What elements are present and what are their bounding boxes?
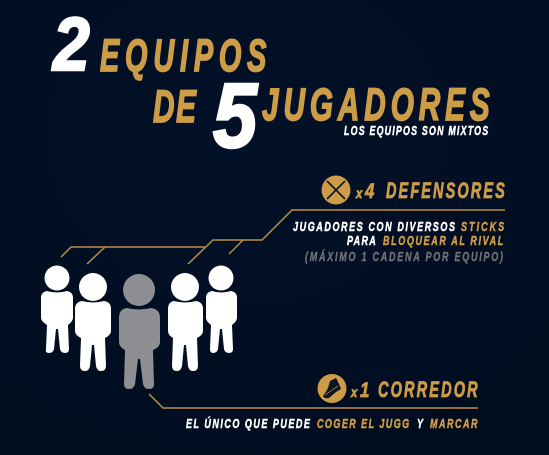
heading: runner: 1 (360, 379, 369, 403)
player: runner (grey) (119, 274, 160, 389)
heading: runner: CORREDOR (378, 377, 478, 402)
player: far left defender (41, 266, 73, 353)
subtitle: LOS EQUIPOS SON MIXTOS (344, 124, 489, 139)
text: defenders description (293, 221, 505, 264)
text: runner description: MARCAR (430, 418, 478, 431)
player: right defender (168, 273, 203, 371)
text: runner description (186, 417, 478, 431)
title: 2 (51, 2, 90, 86)
connector lines: defenders (61, 210, 505, 264)
text: defenders description: (MÁXIMO 1 CADENA POR EQUIPO) (305, 250, 503, 264)
connector line: runner (149, 394, 478, 408)
title: DE (153, 82, 197, 133)
text: runner description: Y (417, 418, 424, 431)
heading: defenders: x (355, 186, 363, 201)
icon: crossed sticks (322, 176, 350, 204)
text: defenders description: JUGADORES CON DIVERSOS (293, 221, 456, 234)
title: JUGADORES (262, 80, 490, 131)
player: left defender (75, 273, 111, 371)
title (51, 2, 490, 167)
player: far right defender (206, 266, 237, 353)
text: defenders description: PARA (347, 235, 376, 248)
heading: runner: x (350, 385, 358, 400)
text: runner description: EL ÚNICO QUE PUEDE (186, 417, 310, 431)
title: 5 (213, 64, 258, 167)
icon: running shoe (318, 374, 346, 403)
text: runner description: COGER EL JUGG (317, 418, 410, 431)
text: defenders description: BLOQUEAR AL RIVAL (383, 235, 503, 248)
title: EQUIPOS (100, 32, 266, 82)
heading: defenders: 4 (364, 180, 375, 204)
heading: defenders: DEFENSORES (386, 178, 505, 203)
text: defenders description: STICKS (461, 221, 505, 234)
